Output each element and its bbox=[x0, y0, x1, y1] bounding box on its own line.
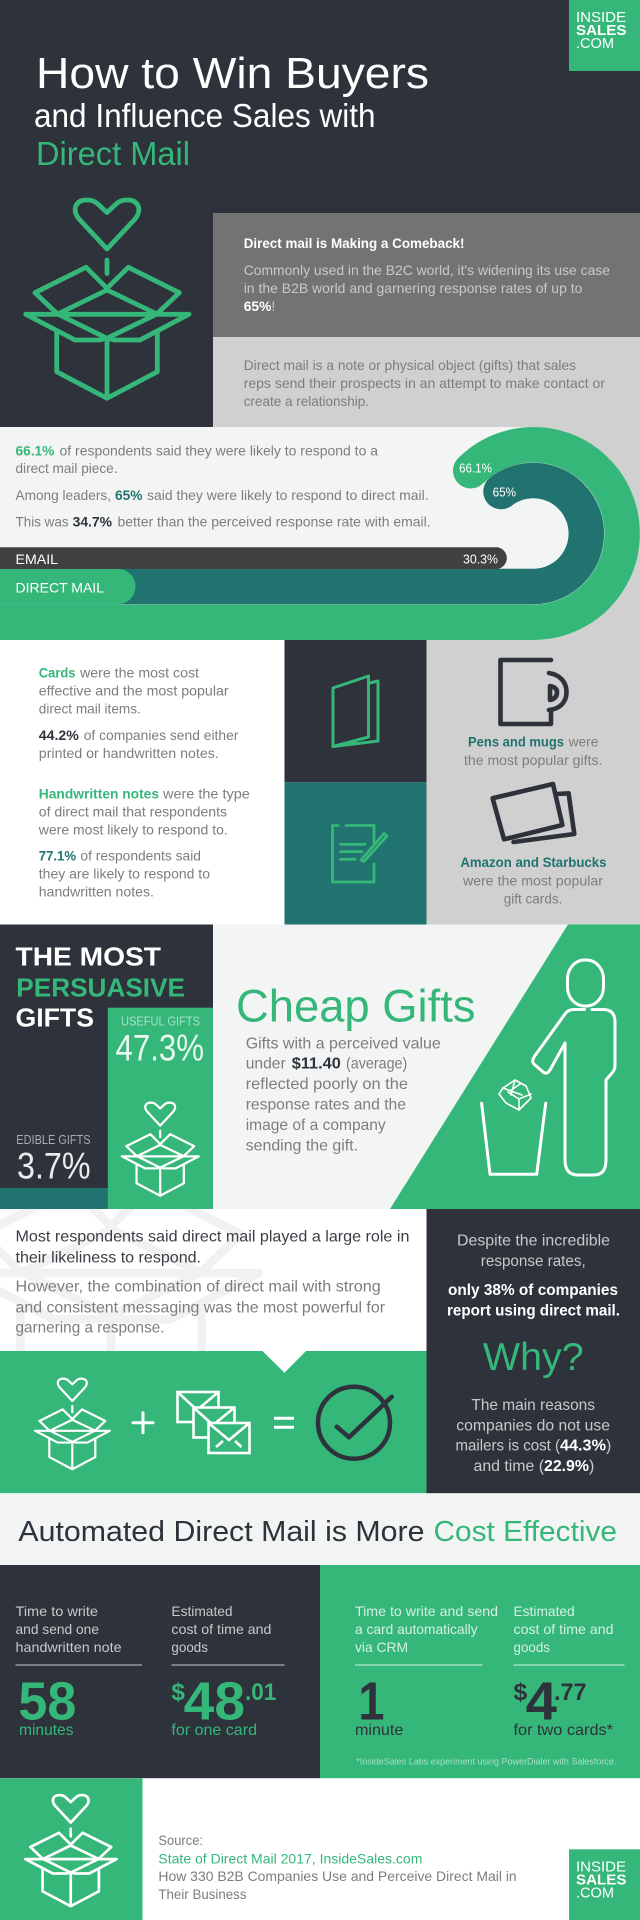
panel: cards and notes text: of direct mail that respondents bbox=[39, 803, 227, 819]
text: response rate statistics: 65% bbox=[115, 487, 143, 503]
panel: definition: Direct mail is a note or physical object (gifts) that sales bbox=[244, 357, 576, 373]
panel: cards and notes text: they are likely to respond to bbox=[39, 866, 210, 882]
panel: cards and notes text: effective and the most popular bbox=[39, 683, 229, 699]
text: cheap gifts description: $11.40 bbox=[292, 1055, 341, 1072]
stat: $48.01: for one card bbox=[171, 1722, 257, 1739]
heading: the most persuasive gifts: PERSUASIVE bbox=[16, 972, 185, 1002]
panel: why: mailers is cost ( bbox=[456, 1438, 561, 1455]
logo: InsideSales top: INSIDE bbox=[576, 9, 626, 26]
stat: useful gifts: 47.3% bbox=[116, 1028, 204, 1069]
panel: why: and time ( bbox=[474, 1458, 545, 1475]
panel: most persuasive gifts bbox=[0, 924, 213, 1209]
text: cheap gifts description: image of a company bbox=[246, 1117, 386, 1134]
panel: definition: create a relationship. bbox=[244, 393, 369, 409]
panel: why: The main reasons bbox=[471, 1397, 595, 1414]
text: gift cards: were the most popular bbox=[462, 872, 603, 888]
text: pens and mugs: the most popular gifts. bbox=[464, 752, 602, 768]
text: time to write by hand: Time to write bbox=[16, 1603, 98, 1619]
chart: arc comparison bbox=[0, 445, 622, 622]
icon: person throwing gift in trash bbox=[482, 960, 615, 1175]
logo: InsideSales bottom bbox=[569, 1849, 640, 1920]
panel: why: response rates, bbox=[481, 1253, 586, 1270]
text: cheap gifts description: reflected poorly on the bbox=[246, 1076, 408, 1093]
heading: the most persuasive gifts bbox=[16, 941, 185, 1033]
panel: footer box tile bbox=[0, 1778, 142, 1920]
title bbox=[34, 49, 429, 172]
text: time to send automatically: a card automatically bbox=[355, 1621, 478, 1637]
text: response rate statistics: 66.1% bbox=[16, 443, 55, 459]
text: response rate statistics: 34.7% bbox=[73, 514, 113, 530]
panel: equation bbox=[0, 1351, 426, 1493]
panel: gifts bbox=[426, 640, 640, 924]
panel: cheap gifts bbox=[213, 924, 640, 1209]
panel: cards and notes text: direct mail items. bbox=[39, 700, 141, 716]
decorative faint box bbox=[0, 1209, 263, 1351]
text: response rate statistics: Among leaders, bbox=[16, 487, 111, 503]
text: time to write by hand bbox=[16, 1603, 122, 1655]
stat: useful gifts bbox=[116, 1013, 204, 1069]
panel: header background bbox=[0, 0, 640, 427]
panel: cards and notes text: were the type bbox=[162, 785, 250, 801]
panel: why: companies do not use bbox=[456, 1417, 610, 1434]
panel: comeback: Commonly used in the B2C world, it's widening its use case bbox=[244, 262, 610, 278]
panel: comeback bbox=[213, 213, 640, 337]
text: response rate statistics: direct mail piece. bbox=[16, 460, 118, 476]
text: response rate statistics: This was bbox=[16, 514, 69, 530]
text: estimated cost: Estimated bbox=[171, 1603, 233, 1619]
icon: envelopes bbox=[178, 1392, 250, 1453]
stat: $4.77: 4 bbox=[526, 1671, 557, 1731]
logo: InsideSales bottom: INSIDE bbox=[576, 1858, 626, 1875]
panel: why: ) bbox=[589, 1458, 594, 1475]
text: time to write by hand: and send one bbox=[16, 1621, 99, 1637]
heading: automated direct mail: Cost Effective bbox=[434, 1516, 617, 1548]
text: cheap gifts description: under bbox=[246, 1055, 286, 1072]
text: estimated automated cost: goods bbox=[514, 1639, 550, 1655]
logo: InsideSales bottom: .COM bbox=[576, 1884, 614, 1901]
panel: direct mail messaging bbox=[0, 1209, 408, 1351]
panel: why: 44.3% bbox=[560, 1438, 606, 1455]
panel: cards and notes text: were most likely to respond to. bbox=[38, 821, 228, 837]
text: gift cards: gift cards. bbox=[504, 890, 562, 906]
panel: why bbox=[426, 1209, 640, 1493]
text: time to send automatically: via CRM bbox=[355, 1639, 408, 1655]
text: cheap gifts description: (average) bbox=[346, 1055, 407, 1072]
text: estimated automated cost: cost of time and bbox=[514, 1621, 614, 1637]
panel: cards and notes text: of companies send either bbox=[84, 727, 239, 743]
text: estimated cost bbox=[171, 1603, 271, 1655]
panel: cards and notes text: of respondents said bbox=[80, 848, 201, 864]
logo: InsideSales top bbox=[569, 0, 640, 71]
logo: InsideSales top: .COM bbox=[576, 35, 614, 52]
title: Direct Mail bbox=[36, 135, 190, 172]
panel: cards and notes text: handwritten notes. bbox=[39, 884, 154, 900]
text: messaging: their likeliness to respond. bbox=[16, 1249, 201, 1266]
stat: $48.01 bbox=[171, 1671, 276, 1739]
panel: handwritten note icon tile bbox=[284, 782, 426, 924]
panel: cards and notes text: 77.1% bbox=[39, 848, 77, 864]
text: estimated automated cost: Estimated bbox=[514, 1603, 575, 1619]
heading: the most persuasive gifts: GIFTS bbox=[16, 1003, 94, 1033]
text: time to send automatically: Time to write and send bbox=[355, 1603, 498, 1619]
heading: cheap gifts: Cheap Gifts bbox=[236, 981, 476, 1032]
panel: response rate background bbox=[0, 427, 640, 640]
icon: box bbox=[35, 1379, 110, 1469]
title: How to Win Buyers bbox=[36, 49, 429, 98]
panel: comeback: in the B2B world and garnering response rates of up to bbox=[244, 280, 583, 296]
panel: why: Despite the incredible bbox=[457, 1233, 610, 1250]
stat: $4.77: .77 bbox=[554, 1679, 586, 1706]
text: time to write by hand: handwritten note bbox=[16, 1639, 122, 1655]
panel: cards and notes text: Cards bbox=[39, 665, 76, 681]
panel: why: 22.9% bbox=[544, 1458, 589, 1475]
stat: edible gifts: 3.7% bbox=[17, 1146, 91, 1187]
text: estimated automated cost bbox=[514, 1603, 614, 1655]
text: cheap gifts description: response rates and the bbox=[246, 1096, 406, 1113]
logo: InsideSales top: SALES bbox=[576, 22, 626, 39]
panel: why: only 38% of companies bbox=[448, 1282, 618, 1299]
text: response rate statistics bbox=[16, 443, 431, 530]
text: messaging: Most respondents said direct mail played a large role in bbox=[16, 1229, 409, 1246]
heading: why: Why? bbox=[483, 1336, 584, 1379]
panel: why: report using direct mail. bbox=[447, 1303, 620, 1320]
logo: InsideSales bottom: SALES bbox=[576, 1871, 626, 1888]
text: messaging: garnering a response. bbox=[16, 1320, 164, 1337]
heading: the most persuasive gifts: THE MOST bbox=[16, 941, 161, 971]
stat: 1 minute bbox=[355, 1671, 403, 1739]
stat: $48.01: .01 bbox=[245, 1679, 276, 1706]
stat: edible gifts: EDIBLE GIFTS bbox=[16, 1132, 91, 1147]
stat: 1 minute: minute bbox=[355, 1722, 403, 1739]
stat: 58 minutes: minutes bbox=[19, 1722, 74, 1739]
text: gift cards: Amazon and Starbucks bbox=[460, 854, 607, 870]
text: response rate statistics: said they were likely to respond to direct mail. bbox=[147, 487, 429, 503]
text: cheap gifts description: Gifts with a perceived value bbox=[246, 1035, 441, 1052]
text: response rate statistics: of respondents said they were likely to respond to a bbox=[60, 443, 378, 459]
panel: definition bbox=[213, 337, 640, 427]
panel: footer background bbox=[0, 1778, 640, 1920]
chart: arc comparison: EMAIL bbox=[16, 551, 58, 567]
stat: $4.77: for two cards* bbox=[514, 1722, 613, 1739]
text: gift cards bbox=[460, 854, 607, 906]
chart: arc comparison: 66.1% bbox=[459, 461, 492, 476]
stat: useful gifts: USEFUL GIFTS bbox=[121, 1013, 200, 1028]
chart: arc comparison: DIRECT MAIL bbox=[16, 580, 104, 596]
text: source: How 330 B2B Companies Use and Perceive Direct Mail in bbox=[158, 1868, 517, 1884]
stat: edible gifts bbox=[16, 1132, 91, 1187]
panel: cards and notes text bbox=[0, 640, 284, 924]
chart: arc comparison: 30.3% bbox=[463, 551, 498, 566]
icon: mug bbox=[500, 660, 566, 724]
panel: card icon tile bbox=[284, 640, 426, 782]
panel: why: ) bbox=[606, 1438, 611, 1455]
text: source: State of Direct Mail 2017, InsideSales.com bbox=[158, 1850, 422, 1866]
text: time to send automatically bbox=[355, 1603, 498, 1655]
text: pens and mugs bbox=[464, 734, 602, 768]
text: cheap gifts description: sending the gift. bbox=[246, 1138, 358, 1155]
panel: automated cost bbox=[320, 1565, 640, 1778]
footnote: *InsideSales Labs experiment using PowerDialer with Salesforce. bbox=[356, 1757, 616, 1767]
text: pens and mugs: were bbox=[568, 734, 599, 750]
panel: comeback: ! bbox=[271, 298, 275, 314]
icon: open box with heart bbox=[26, 200, 189, 398]
icon: equals bbox=[274, 1418, 294, 1427]
chart: arc comparison: 65% bbox=[493, 485, 516, 500]
panel: cards and notes text: were the most cost bbox=[79, 665, 199, 681]
stat: 1 minute: 1 bbox=[358, 1671, 384, 1731]
text: cheap gifts description bbox=[246, 1035, 441, 1155]
heading: automated direct mail bbox=[0, 1493, 640, 1565]
panel: cards and notes text: printed or handwritten notes. bbox=[39, 745, 219, 761]
panel: comeback: Direct mail is Making a Comeback! bbox=[244, 235, 464, 251]
stat: $4.77 bbox=[514, 1671, 613, 1739]
text: pens and mugs: Pens and mugs bbox=[468, 734, 564, 750]
text: messaging bbox=[16, 1229, 409, 1337]
text: estimated cost: cost of time and bbox=[171, 1621, 271, 1637]
text: source: Their Business bbox=[158, 1886, 246, 1902]
heading: automated direct mail: Automated Direct Mail is More bbox=[18, 1516, 425, 1548]
stat: $48.01: $ bbox=[171, 1679, 186, 1706]
panel: definition: reps send their prospects in an attempt to make contact or bbox=[244, 375, 605, 391]
panel: comeback: 65% bbox=[244, 298, 272, 314]
panel: cards and notes text: 44.2% bbox=[39, 727, 79, 743]
panel: cards and notes text: Handwritten notes bbox=[39, 785, 159, 801]
icon: check mark bbox=[318, 1387, 392, 1459]
text: source bbox=[158, 1832, 517, 1902]
icon: gift cards bbox=[493, 784, 574, 842]
text: response rate statistics: better than the perceived response rate with email. bbox=[118, 514, 431, 530]
stat: 58 minutes: 58 bbox=[18, 1671, 76, 1731]
text: messaging: However, the combination of direct mail with strong bbox=[16, 1279, 381, 1296]
text: source: Source: bbox=[158, 1832, 203, 1848]
icon: white box bbox=[122, 1103, 199, 1196]
title: and Influence Sales with bbox=[34, 97, 376, 134]
text: messaging: and consistent messaging was the most powerful for bbox=[16, 1299, 386, 1316]
text: estimated cost: goods bbox=[171, 1639, 208, 1655]
stat: $4.77: $ bbox=[514, 1679, 528, 1706]
stat: $48.01: 48 bbox=[184, 1671, 245, 1731]
panel: manual cost bbox=[0, 1565, 320, 1778]
icon: plus bbox=[133, 1413, 153, 1433]
